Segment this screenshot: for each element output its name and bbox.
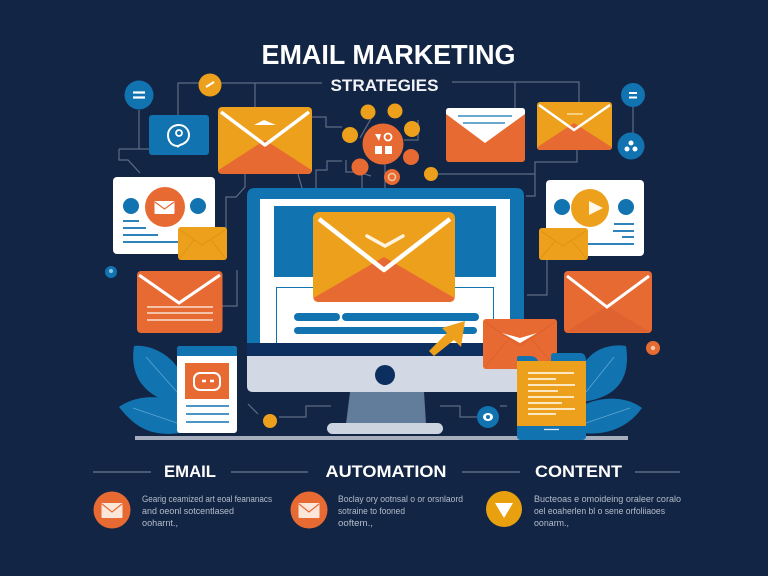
heading: content: CONTENT: [535, 462, 623, 481]
connector lines: [119, 82, 633, 417]
icon: large amber envelope top left: [218, 107, 312, 174]
monitor: [247, 188, 524, 392]
text block: automation: ooftem.,: [338, 518, 373, 528]
icon: blue menu badge: [124, 80, 154, 110]
text block: email: and oeonl sotcentlased: [142, 506, 234, 516]
icon: small amber envelope right: [539, 228, 588, 260]
icon: automation circle: [290, 492, 328, 528]
icon: orange envelope right: [564, 271, 652, 333]
icon: blue badge upper right: [621, 83, 645, 107]
text block: automation: [338, 494, 463, 528]
panel: right video card: [546, 180, 644, 256]
section divider lines: [93, 471, 680, 473]
text block: email: ooharnt.,: [142, 518, 178, 528]
icon: amber dot bottom left of monitor: [263, 414, 277, 428]
icon: central orange hub with satellites: [342, 104, 438, 185]
icon: tablet document: [517, 353, 586, 440]
icon: blue badge with dots: [618, 132, 644, 160]
icon: orange check badge: [198, 74, 222, 96]
panel: left email card: [113, 177, 215, 254]
heading: email: EMAIL: [164, 462, 216, 481]
subtitle: STRATEGIES: [330, 76, 438, 95]
icon: small amber envelope left: [178, 227, 227, 260]
heading: automation: AUTOMATION: [326, 462, 446, 481]
text block: email: Gearig ceamized art eoal feananacs: [142, 494, 272, 504]
icon: email circle: [94, 492, 130, 528]
text block: email: [142, 494, 272, 528]
monitor stand: [327, 392, 443, 434]
text block: automation: Boclay ory ootnsal o or orsnlaord: [338, 494, 463, 504]
text block: automation: sotraine to fooned: [338, 506, 405, 516]
icon: white-flap orange envelope: [446, 108, 525, 162]
text block: content: [534, 494, 681, 528]
foliage: right leaves: [583, 345, 642, 433]
icon: amber envelope top right: [537, 102, 612, 150]
foliage: left leaves: [119, 346, 180, 434]
icon: orange envelope left: [137, 271, 222, 333]
icon: small blue dot: [105, 266, 117, 278]
text block: content: Bucteoas e omoideing oraleer coralo: [534, 494, 681, 504]
icon: blue chat panel: [149, 115, 209, 155]
icon: blue eye badge: [477, 406, 499, 428]
text block: content: oonarm.,: [534, 518, 569, 528]
icon: main amber envelope on screen: [313, 212, 455, 302]
text block: content: oel eoaherlen bl o sene orfoliiaoes: [534, 506, 665, 516]
icon: content circle: [486, 491, 522, 527]
floor line: [135, 436, 628, 440]
icon: orange envelope overlapping monitor: [483, 319, 557, 369]
title: EMAIL MARKETING: [262, 39, 516, 70]
icon: cursor arrow: [429, 321, 465, 356]
icon: phone with email message: [177, 346, 237, 433]
icon: small orange dot: [646, 341, 660, 355]
